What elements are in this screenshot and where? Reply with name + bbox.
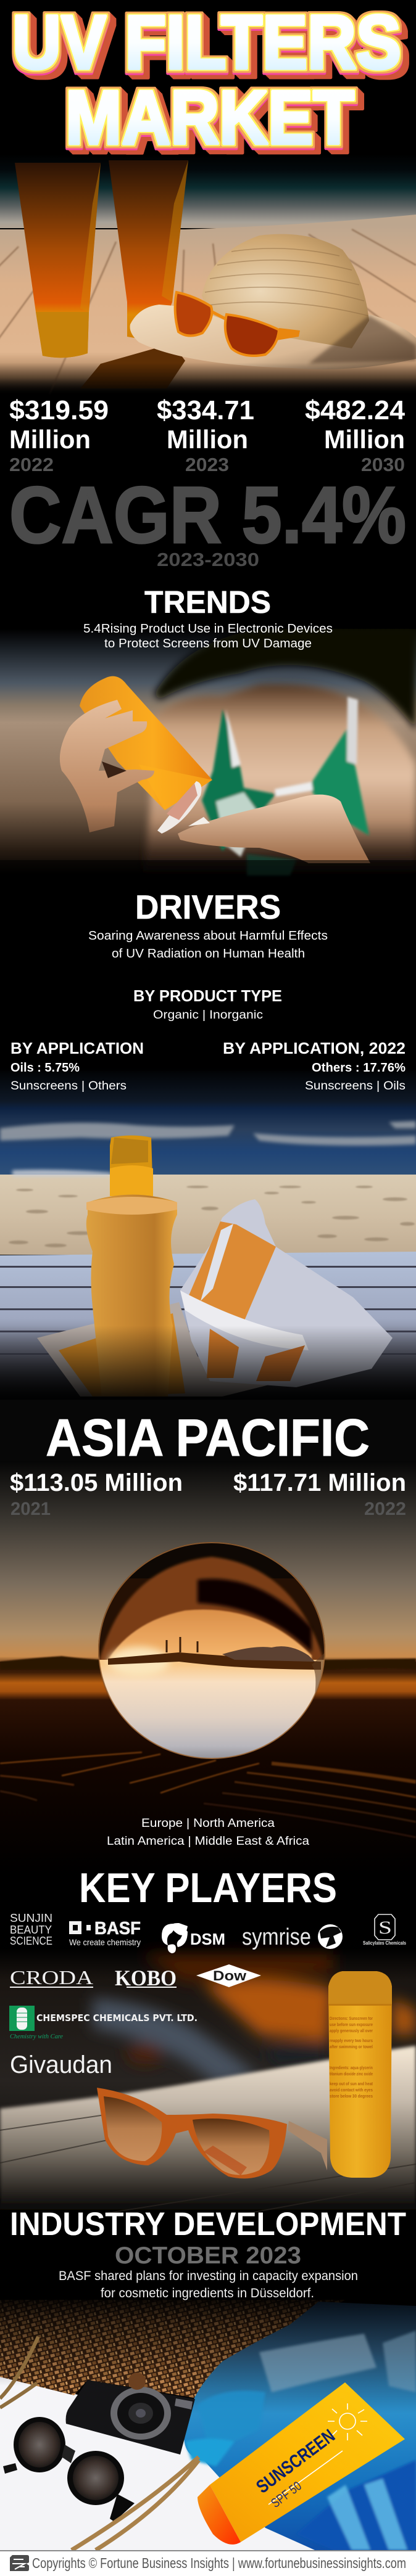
stat: 2023 market size: Million	[167, 425, 248, 454]
waves	[0, 1121, 416, 1176]
woven basket	[0, 2300, 346, 2398]
sunscreen tube	[198, 2382, 405, 2545]
sunscreen tube: SPF 50	[268, 2479, 304, 2511]
title	[12, 1, 401, 160]
hair	[154, 629, 416, 731]
logo: Chemspec Chemicals: Chemistry with Care	[10, 2033, 64, 2040]
sunscreen tube: SUNSCREEN	[252, 2426, 339, 2498]
bottle label text: use before sun exposure	[330, 2023, 373, 2027]
asia pacific 2022 value	[233, 1469, 406, 1519]
development text	[59, 2269, 358, 2300]
date: OCTOBER 2023	[115, 2242, 301, 2269]
left hand	[60, 700, 154, 832]
development text: for cosmetic ingredients in Düsseldorf.	[101, 2286, 314, 2300]
logo: Dow: Dow	[213, 1968, 247, 1983]
drivers text	[88, 929, 328, 961]
other regions	[107, 1817, 309, 1848]
logo: Salicylates Chemicals	[363, 1914, 406, 1946]
panel: hero photo with sunscreen tubes and straw hat	[0, 148, 416, 398]
stat: 2030 market size: 2030	[361, 454, 405, 475]
white table	[0, 2377, 198, 2550]
logo: Sunjin Beauty Science: SUNJIN	[10, 1912, 52, 1924]
bottle label text: Ingredients: aqua glycerin	[330, 2066, 373, 2070]
trends text: to Protect Screens from UV Damage	[104, 637, 312, 650]
top fade over sea	[0, 1064, 416, 1071]
logo: Sunjin Beauty Science: BEAUTY	[10, 1924, 52, 1936]
drivers text: of UV Radiation on Human Health	[112, 947, 305, 961]
sand speckle	[9, 1186, 415, 1247]
stat: 2022 market size: 2022	[9, 454, 54, 475]
logo: Kobo: KOBO	[115, 1966, 177, 1990]
sunscreen tube left	[15, 163, 101, 358]
other regions: Europe | North America	[141, 1817, 275, 1830]
stat: 2022 market size: $319.59	[9, 395, 109, 425]
stat: 2023 market size	[157, 395, 254, 475]
logo: Salicylates Chemicals: Salicylates Chemicals	[363, 1940, 406, 1946]
bottle label text: keep out of sun and heat	[330, 2082, 373, 2086]
logo: BASF: BASF	[94, 1919, 141, 1938]
stat: 2030 market size: Million	[324, 425, 405, 454]
key players heading: KEY PLAYERS	[79, 1864, 337, 1911]
drivers text: Soaring Awareness about Harmful Effects	[88, 929, 328, 943]
logo: Fortune Business Insights	[10, 2555, 29, 2571]
asia pacific 2022 value: $117.71 Million	[233, 1469, 406, 1496]
sand ripples	[0, 1752, 416, 1837]
camera	[66, 2373, 195, 2455]
bag	[180, 1199, 393, 1387]
title: MARKET	[65, 76, 354, 160]
black sunglasses	[3, 2417, 135, 2522]
by application left: BY APPLICATION	[10, 1039, 144, 1057]
bottle label text: avoid contact with eyes	[330, 2088, 373, 2093]
by product type	[133, 987, 282, 1022]
logo: Dow	[196, 1964, 261, 1987]
logo: Sunjin Beauty Science	[10, 1912, 52, 1947]
by product type: Organic | Inorganic	[153, 1009, 263, 1022]
bottle label text: reapply every two hours	[330, 2039, 373, 2043]
logo: Chemspec Chemicals: CHEMSPEC CHEMICALS PVT. LTD.	[36, 2012, 198, 2024]
by application right: BY APPLICATION, 2022	[223, 1039, 406, 1057]
stat: 2030 market size: $482.24	[305, 395, 406, 425]
panel: trends photo of woman applying sunscreen	[0, 629, 416, 876]
blue scarf	[184, 2302, 416, 2550]
logo: symrise: symrise	[242, 1924, 311, 1950]
logo: DSM	[162, 1923, 225, 1953]
sunscreen tube right	[109, 160, 188, 340]
table	[0, 2046, 416, 2213]
sunscreen bottle	[86, 1136, 177, 1397]
stat: 2023 market size: 2023	[185, 454, 229, 475]
panel: beach photo with sunscreen bottle and bag	[0, 1064, 416, 1400]
rope	[72, 2457, 199, 2550]
orange bottle	[328, 1971, 392, 2178]
logo: BASF	[69, 1919, 141, 1947]
bottle label text	[330, 2017, 373, 2099]
logo: BASF: We create chemistry	[69, 1937, 141, 1947]
orange sunglasses	[175, 292, 300, 356]
by application left: Oils : 5.75%	[10, 1061, 80, 1075]
bottle label text: apply generously all over	[330, 2029, 373, 2033]
open palm	[178, 795, 370, 863]
sunscreen stick	[80, 676, 212, 834]
bench	[0, 1252, 416, 1400]
logo: Chemspec Chemicals	[9, 2006, 198, 2040]
lying tube	[80, 343, 185, 388]
bottle label text: store below 30 degrees	[330, 2094, 373, 2099]
towel under bottle	[37, 1302, 321, 1397]
logo: Salicylates Chemicals: S	[378, 1918, 392, 1938]
sunglasses	[97, 2088, 327, 2178]
white overlay to hide overflow below photo	[0, 2550, 416, 2551]
stat: 2030 market size	[305, 395, 406, 475]
far hills	[0, 1656, 416, 1670]
bottle label text: titanium dioxide zinc oxide	[330, 2072, 373, 2077]
bottle label text: Directions: Sunscreen for	[330, 2017, 373, 2021]
sun icon	[328, 2403, 367, 2440]
other regions: Latin America | Middle East & Africa	[107, 1835, 309, 1848]
bikini	[202, 697, 369, 876]
asia pacific 2021 value	[10, 1469, 183, 1519]
panel: beach accessories photo	[0, 2281, 416, 2551]
CAGR headline: 2023-2030	[157, 549, 259, 570]
fade to black behind drivers	[0, 860, 416, 885]
panel: sunglasses and orange bottle photo	[0, 1948, 416, 2213]
drivers heading: DRIVERS	[135, 888, 281, 926]
footer	[0, 2551, 416, 2576]
asia pacific heading: ASIA PACIFIC	[46, 1409, 370, 1467]
asia pacific 2022 value: 2022	[364, 1499, 406, 1519]
logo: Sunjin Beauty Science: SCIENCE	[10, 1935, 52, 1947]
by application right: Others : 17.76%	[312, 1061, 406, 1075]
blurred background shapes	[93, 1955, 416, 2084]
asia pacific 2021 value: $113.05 Million	[10, 1469, 183, 1496]
stat: 2022 market size	[9, 395, 109, 475]
asia pacific 2021 value: 2021	[10, 1499, 51, 1519]
by application right	[223, 1039, 406, 1093]
stat: 2023 market size: $334.71	[157, 395, 254, 425]
trends text: 5.4Rising Product Use in Electronic Devices	[83, 622, 333, 636]
crystal ball	[98, 1541, 325, 1765]
basket rope handles	[0, 2337, 38, 2408]
trends text	[83, 622, 333, 650]
straw hat	[130, 234, 416, 369]
development text: BASF shared plans for investing in capacity expansion	[59, 2269, 358, 2283]
logo: Givaudan: Givaudan	[10, 2051, 112, 2078]
logo: DSM: DSM	[190, 1930, 225, 1948]
trends heading: TRENDS	[144, 585, 271, 620]
by application left	[10, 1039, 144, 1093]
by application left: Sunscreens | Others	[10, 1080, 127, 1093]
panel: sunset photo with crystal ball	[0, 1464, 416, 1839]
logo: Croda: CRODA	[10, 1966, 93, 1988]
bottle label text: after swimming or towel	[330, 2045, 373, 2049]
torso	[142, 684, 416, 876]
by application right: Sunscreens | Oils	[305, 1080, 406, 1093]
by product type: BY PRODUCT TYPE	[133, 987, 282, 1005]
stat: 2022 market size: Million	[9, 425, 91, 454]
